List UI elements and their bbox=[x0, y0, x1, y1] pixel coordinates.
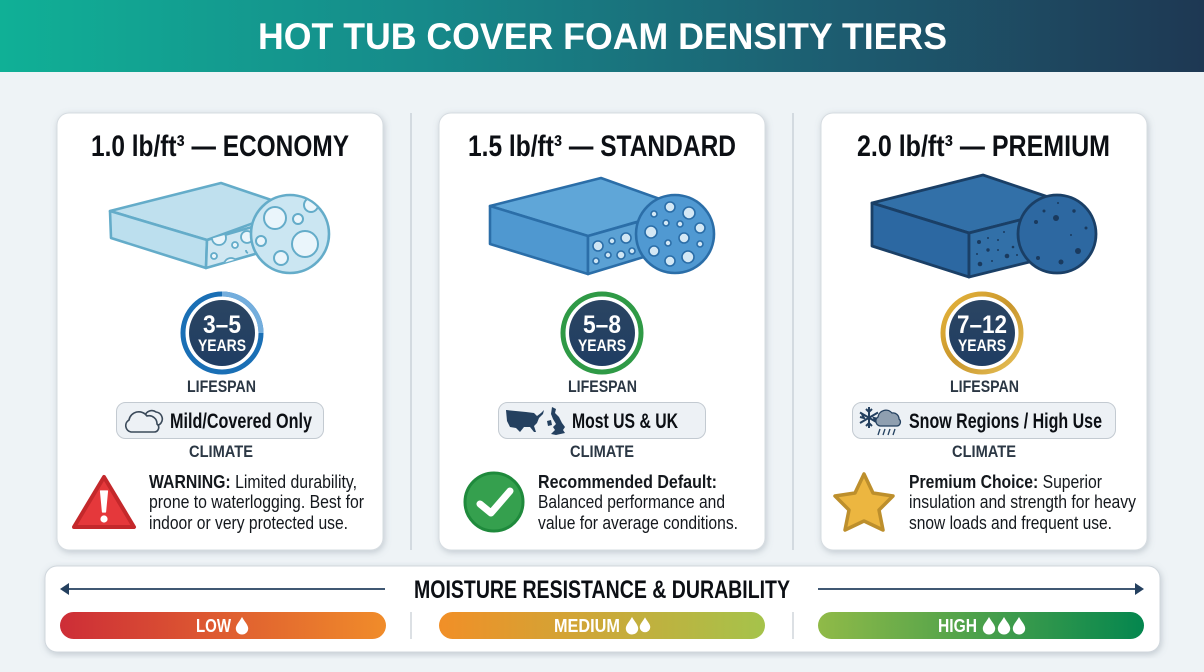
icon: gold star bbox=[835, 474, 893, 530]
bar: medium bbox=[439, 612, 765, 639]
label: lifespan: LIFESPAN bbox=[187, 377, 256, 396]
text: premium choice bbox=[909, 471, 1137, 533]
scale heading: MOISTURE RESISTANCE & DURABILITY bbox=[414, 576, 790, 604]
climate pill: snow regions: Snow Regions / High Use bbox=[909, 410, 1102, 433]
text: economy warning: indoor or very protected use. bbox=[149, 512, 348, 533]
text: economy warning: prone to waterlogging. Best for bbox=[149, 491, 364, 512]
climate pill: mild: Mild/Covered Only bbox=[170, 410, 312, 433]
badge: 5-8 years bbox=[563, 294, 641, 372]
text: premium choice: Premium Choice: Superior bbox=[909, 471, 1102, 492]
icon: high density foam block bbox=[872, 175, 1096, 277]
heading: premium: 2.0 lb/ft³ — PREMIUM bbox=[857, 130, 1110, 163]
icon: snowflake and rain cloud bbox=[860, 407, 900, 435]
badge: 7-12 years: 7–12 bbox=[957, 311, 1007, 339]
bar: high bbox=[818, 612, 1144, 639]
climate pill: snow regions bbox=[852, 402, 1116, 438]
bar: low bbox=[60, 612, 386, 639]
header banner bbox=[0, 0, 1204, 72]
label: climate: CLIMATE bbox=[570, 442, 634, 461]
text: standard recommendation bbox=[538, 471, 738, 533]
badge: 3-5 years: YEARS bbox=[198, 336, 246, 355]
icon: warning triangle bbox=[74, 477, 134, 527]
climate pill: most US and UK bbox=[498, 402, 706, 438]
label: climate: CLIMATE bbox=[189, 442, 253, 461]
title: HOT TUB COVER FOAM DENSITY TIERS bbox=[258, 16, 947, 57]
label: climate: CLIMATE bbox=[952, 442, 1016, 461]
text: premium choice: snow loads and frequent use. bbox=[909, 512, 1112, 533]
bar: medium: MEDIUM bbox=[554, 616, 620, 636]
arrow: left bbox=[60, 583, 385, 595]
text: premium choice: insulation and strength for heavy bbox=[909, 491, 1137, 512]
icon: US map bbox=[506, 410, 544, 432]
bar: high: HIGH bbox=[938, 616, 977, 636]
label: lifespan: LIFESPAN bbox=[950, 377, 1019, 396]
heading: economy: 1.0 lb/ft³ — ECONOMY bbox=[91, 130, 349, 163]
heading: standard: 1.5 lb/ft³ — STANDARD bbox=[468, 130, 736, 163]
icon: green check bbox=[465, 473, 523, 531]
badge: 5-8 years: 5–8 bbox=[583, 311, 621, 339]
icon: cloud bbox=[126, 411, 162, 432]
panel: economy tier bbox=[57, 113, 383, 550]
label: lifespan: LIFESPAN bbox=[568, 377, 637, 396]
text: standard recommendation: value for average conditions. bbox=[538, 512, 738, 533]
climate pill: mild bbox=[116, 402, 324, 438]
panel: standard tier bbox=[439, 113, 765, 550]
panel: premium tier bbox=[821, 113, 1147, 550]
badge: 7-12 years bbox=[943, 294, 1021, 372]
text: economy warning bbox=[149, 471, 364, 533]
climate pill: most US and UK: Most US & UK bbox=[572, 410, 678, 433]
badge: 3-5 years: 3–5 bbox=[203, 311, 241, 339]
icon: UK map bbox=[547, 407, 565, 435]
icon: low density foam block bbox=[110, 183, 329, 273]
text: standard recommendation: Recommended Default: bbox=[538, 471, 717, 492]
text: economy warning: WARNING: Limited durability, bbox=[149, 471, 357, 492]
arrow: right bbox=[818, 583, 1144, 595]
badge: 5-8 years: YEARS bbox=[578, 336, 626, 355]
icon: medium density foam block bbox=[490, 178, 714, 274]
badge: 3-5 years bbox=[183, 294, 261, 372]
panel: moisture resistance scale bbox=[45, 566, 1160, 652]
badge: 7-12 years: YEARS bbox=[958, 336, 1006, 355]
text: standard recommendation: Balanced performance and bbox=[538, 491, 725, 512]
bar: low: LOW bbox=[196, 616, 231, 636]
